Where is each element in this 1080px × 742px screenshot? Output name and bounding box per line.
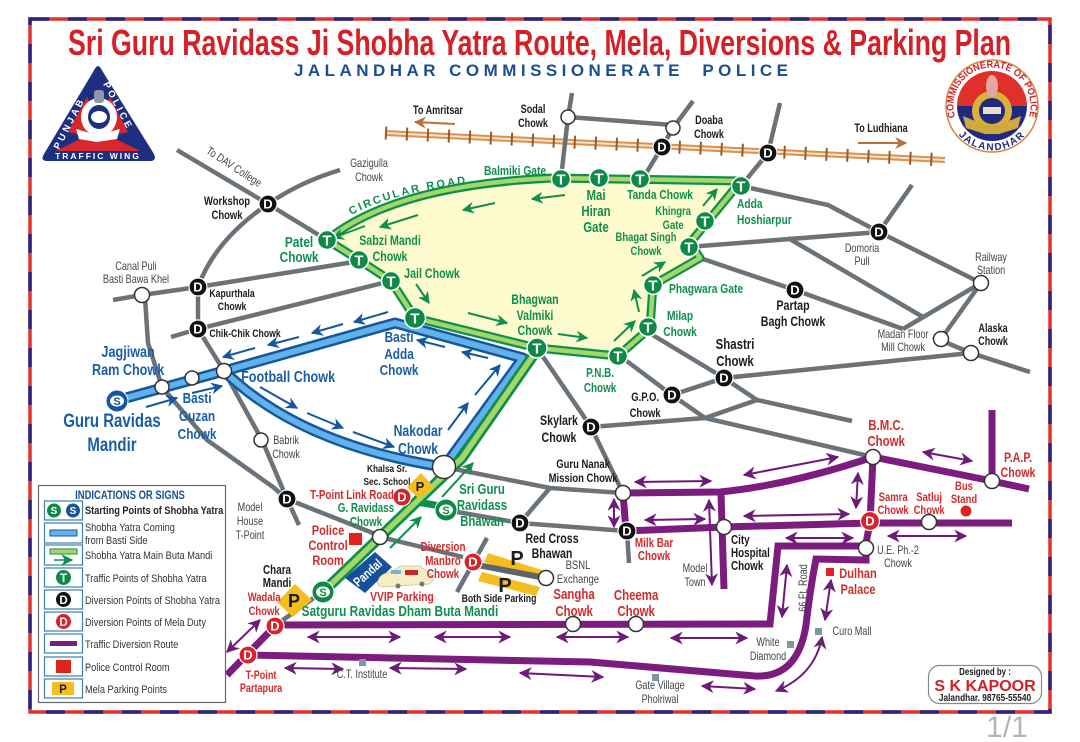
diversion points D black: D [790, 282, 800, 298]
label: Railway Station: Railway [975, 252, 1008, 264]
label: Nakodar Chowk: Nakodar [394, 422, 443, 439]
label: Cheema Chowk: Chowk [617, 603, 655, 619]
label: Sri Guru Ravidass Bhawan: Ravidass [457, 497, 507, 513]
starting points S: S [113, 396, 121, 408]
designer credit box [928, 666, 1042, 704]
legend row: starting points [44, 501, 224, 520]
label: Samra Chowk: Chowk [878, 504, 910, 517]
traffic points T: T [700, 214, 710, 230]
label: Dulhan Palace: Dulhan [839, 566, 877, 581]
green circular road [327, 178, 741, 356]
legend row: yatra main Buta Mandi [44, 545, 212, 565]
diversion points D red: D [468, 554, 478, 570]
label: Model House T-Point: Model [238, 502, 262, 514]
label: Model Town: Model [683, 563, 707, 575]
label: 66 Ft. Road: 66 Ft. Road [798, 564, 810, 612]
traffic points T: T [322, 232, 332, 250]
label: Jagjiwan Ram Chowk: Ram Chowk [92, 362, 165, 379]
label: Gazigulla Chowk: Chowk [355, 172, 384, 184]
pandal: Pandal [351, 556, 385, 590]
label: Phagwara Gate: Phagwara Gate [669, 282, 744, 296]
white junction nodes [134, 110, 1000, 632]
label: Police Control Room: Police [312, 523, 344, 538]
label: Red Cross Bhawan: Red Cross [525, 531, 579, 546]
legend row: traffic points [44, 568, 207, 587]
diversion points D black: D [263, 196, 273, 212]
traffic points T: T [684, 240, 694, 256]
label: Milap Chowk: Chowk [663, 325, 697, 339]
label: To Ludhiana: To Ludhiana [854, 123, 908, 135]
label: Kapurthala Chowk: Kapurthala [209, 288, 255, 300]
designer credit box: Designed by : [959, 666, 1011, 677]
traffic points T: T [386, 274, 396, 290]
label: Adda Hoshiarpur: Hoshiarpur [737, 213, 792, 227]
label: Satluj Chowk: Satluj [916, 491, 942, 504]
gray road network [113, 93, 1030, 625]
label: Both Side Parking: Both Side Parking [462, 593, 536, 605]
label: Bus Stand: Bus [955, 480, 973, 493]
label: To Amritsar: To Amritsar [413, 105, 463, 117]
label: Satluj Chowk: Chowk [914, 504, 946, 517]
traffic points T: T [410, 310, 420, 328]
label: Domoria Pull: Pull [854, 256, 870, 268]
label: U.E. Ph.-2 Chowk: U.E. Ph.-2 [877, 545, 919, 557]
traffic points T [318, 168, 750, 366]
label: Jail Chowk: Jail Chowk [404, 266, 460, 281]
label: Sangha Chowk: Sangha [553, 586, 595, 602]
logo: Punjab Police Traffic Wing: POLICE [103, 82, 132, 128]
label: Bhagwan Valmiki Chowk: Chowk [518, 323, 553, 338]
label: Gate Village Pholriwal: Gate Village [635, 680, 685, 692]
label: Chara Mandi: Mandi [263, 577, 291, 590]
VVIP car [378, 566, 433, 588]
label: Police Control Room: Control [308, 538, 348, 553]
label: City Hospital Chowk: Hospital [731, 547, 770, 560]
legend row: traffic diversion route: Traffic Diversion Route [85, 639, 179, 651]
label: Wadala Chowk: Chowk [249, 605, 281, 618]
label: Babrik Chowk: Babrik [273, 435, 300, 447]
legend row: diversion points mela [44, 612, 207, 631]
bus stand marker [960, 506, 972, 516]
diversion points D black: D [622, 524, 632, 538]
legend row: diversion points yatra: Diversion Points of Shobha Yatra [85, 595, 220, 607]
diversion points D red: D [270, 618, 280, 634]
label: Cheema Chowk: Cheema [614, 587, 659, 603]
label: Patel Chowk: Chowk [280, 249, 319, 265]
label: Partap Bagh Chowk: Bagh Chowk [761, 314, 825, 329]
label: Canal Puli Basti Bawa Khel: Basti Bawa Khel [103, 274, 169, 286]
starting points S: S [319, 587, 327, 599]
legend row: starting points: S [70, 506, 77, 517]
label: Diversion Manbro Chowk: Chowk [427, 568, 460, 581]
legend row: yatra from Basti side: Shobha Yatra Coming [85, 522, 175, 534]
label: circular road: CIRCULAR ROAD [349, 176, 465, 214]
label: Satguru Ravidas Dham Buta Mandi: Satguru Ravidas Dham Buta Mandi [302, 603, 498, 619]
route direction arrows: Amritsar and Ludhiana [415, 122, 906, 143]
label: Police Control Room: Room [312, 553, 344, 568]
label: White Diamond: Diamond [750, 651, 786, 663]
legend row: police control room [44, 657, 170, 676]
label: Milk Bar Chowk: Milk Bar [635, 537, 674, 550]
label: Khalsa Sr. Sec. School: Khalsa Sr. [367, 463, 407, 475]
traffic points T: T [354, 252, 364, 270]
label: Canal Puli Basti Bawa Khel: Canal Puli [115, 261, 157, 273]
blue yatra road from Basti side [115, 323, 523, 467]
diversion points D black: D [193, 322, 203, 336]
traffic diversion routes [227, 410, 1029, 676]
label: Mai Hiran Gate: Hiran [581, 203, 611, 219]
diversion points D black: D [657, 140, 667, 154]
label: Chara Mandi: Chara [263, 564, 292, 577]
label: Doaba Chowk: Chowk [694, 129, 724, 141]
parking bands: P [510, 548, 524, 570]
label: Basti Guzan Chowk: Chowk [178, 426, 217, 442]
route marker squares [359, 628, 822, 681]
label: Domoria Pull: Domoria [845, 243, 879, 255]
diversion points D black: D [515, 516, 525, 530]
Dulhan Palace marker [826, 568, 834, 576]
logo: Punjab Police Traffic Wing [42, 66, 155, 161]
label: G. Ravidass Chowk: Chowk [350, 516, 383, 529]
label: Kapurthala Chowk: Chowk [218, 301, 247, 313]
label: P.A.P. Chowk: Chowk [1001, 465, 1036, 480]
label: Skylark Chowk: Skylark [540, 413, 578, 428]
label: Babrik Chowk: Chowk [272, 449, 301, 461]
label: Sri Guru Ravidass Bhawan: Sri Guru [459, 481, 505, 497]
legend row: police control room: Police Control Room [85, 662, 170, 674]
label: P.N.B. Chowk: Chowk [584, 382, 617, 395]
label: Milap Chowk: Milap [667, 309, 693, 323]
label: C.T. Institute: C.T. Institute [337, 669, 387, 681]
legend row: yatra from Basti side [44, 522, 175, 547]
label: City Hospital Chowk: Chowk [731, 560, 764, 573]
legend row: traffic diversion route [44, 634, 179, 653]
label: Guru Ravidas Mandir: Guru Ravidas [63, 410, 161, 431]
logo: Punjab Police Traffic Wing: PUNJAB [54, 100, 83, 150]
label: Jagjiwan Ram Chowk: Jagjiwan [101, 344, 155, 361]
label: Tanda Chowk: Tanda Chowk [627, 188, 693, 202]
traffic points T: T [736, 178, 746, 196]
traffic points T: T [532, 340, 542, 358]
traffic points T: T [613, 348, 623, 366]
panel: legend [38, 486, 226, 702]
label: Red Cross Bhawan: Bhawan [532, 546, 572, 561]
label: T-Point Link Road: T-Point Link Road [310, 489, 394, 502]
label: Workshop Chowk: Workshop [204, 195, 250, 208]
label: VVIP Parking: VVIP Parking [370, 590, 434, 604]
green main road to Buta Mandi [323, 350, 537, 592]
label: Samra Chowk: Samra [879, 491, 908, 504]
label: To DAV College: To DAV College [204, 145, 264, 190]
label: Bhagat Singh Chowk: Chowk [630, 245, 662, 258]
label: Basti Adda Chowk: Chowk [380, 362, 419, 378]
label: Basti Adda Chowk: Adda [384, 346, 414, 362]
label: G.P.O. Chowk: G.P.O. [631, 391, 659, 404]
label: T-Point Partapura: Partapura [240, 683, 282, 695]
label: Mai Hiran Gate: Gate [583, 219, 609, 235]
label: Mai Hiran Gate: Mai [586, 187, 606, 203]
designer credit box: Jalandhar. 98765-55540 [939, 692, 1031, 704]
diversion points D black: D [667, 388, 677, 402]
logo: Commissionerate of Police Jalandhar seal [945, 59, 1039, 153]
label: Gate Village Pholriwal: Pholriwal [642, 694, 678, 706]
label: Patel Chowk: Patel [285, 234, 313, 250]
starting points S [106, 390, 457, 603]
legend row: traffic points: Traffic Points of Shobha Yatra [85, 573, 207, 585]
label: White Diamond: White [756, 637, 780, 649]
label: Basti Guzan Chowk: Basti [183, 390, 212, 406]
label: BSNL Exchange: BSNL [566, 559, 590, 572]
label: Diversion Manbro Chowk: Diversion [421, 541, 466, 554]
label: Shastri Chowk: Chowk [716, 353, 754, 369]
label: B.M.C. Chowk: Chowk [867, 433, 905, 449]
label: P.A.P. Chowk: P.A.P. [1004, 450, 1032, 465]
logo: Punjab Police Traffic Wing: TRAFFIC WING [55, 151, 141, 161]
label: Gazigulla Chowk: Gazigulla [350, 158, 388, 170]
mela parking diamonds: P [288, 591, 300, 611]
label: Sodal Chowk: Sodal [521, 104, 545, 116]
diversion points D black: D [193, 280, 203, 294]
mela parking diamonds [277, 473, 434, 617]
designer credit box: S K KAPOOR [934, 678, 1036, 695]
legend heading: INDICATIONS OR SIGNS [75, 489, 185, 502]
label: Nakodar Chowk: Chowk [398, 440, 438, 457]
traffic points T: T [643, 320, 653, 336]
legend row: diversion points mela: Diversion Points of Mela Duty [85, 617, 207, 629]
label: Sabzi Mandi Chowk: Sabzi Mandi [359, 233, 421, 248]
railway track [385, 133, 945, 160]
label: Partap Bagh Chowk: Partap [776, 298, 810, 313]
legend row: starting points: Starting Points of Shobha Yatra [85, 505, 224, 517]
logo: Commissionerate of Police Jalandhar seal: COMMISSIONERATE OF POLICE [946, 60, 1038, 118]
label: BSNL Exchange: Exchange [557, 573, 599, 586]
legend row: starting points: S [51, 506, 58, 517]
diversion points D black: D [719, 370, 729, 386]
diversion points D red: D [243, 648, 253, 662]
label: City Hospital Chowk: City [731, 534, 750, 547]
label: Madan Floor Mill Chowk: Mill Chowk [881, 342, 926, 354]
label: Model House T-Point: House [237, 516, 263, 528]
legend row: parking points [44, 679, 167, 698]
label: Dulhan Palace: Palace [840, 582, 876, 597]
label: U.E. Ph.-2 Chowk: Chowk [884, 558, 913, 570]
label: Basti Guzan Chowk: Guzan [179, 408, 215, 424]
label: Football Chowk: Football Chowk [241, 369, 336, 386]
label: Adda Hoshiarpur: Adda [737, 197, 763, 211]
logo: Commissionerate of Police Jalandhar seal: JALANDHAR [959, 132, 1024, 150]
pandal [345, 552, 392, 593]
parking bands [478, 548, 545, 597]
label: Alaska Chowk: Alaska [978, 323, 1008, 335]
diversion points D black: D [763, 146, 773, 160]
label: Balmiki Gate: Balmiki Gate [484, 164, 547, 178]
label: Bhagat Singh Chowk: Bhagat Singh [615, 231, 677, 244]
label: G.P.O. Chowk: Chowk [630, 407, 662, 420]
traffic points T: T [635, 172, 645, 188]
double-headed diversion arrows [227, 452, 972, 691]
label: Model House T-Point: T-Point [236, 530, 265, 542]
label: Railway Station: Station [977, 265, 1005, 277]
label: Basti Adda Chowk: Basti [385, 329, 414, 345]
label: Shastri Chowk: Shastri [716, 336, 754, 352]
blue direction arrows [146, 312, 500, 447]
diversion points D black: D [874, 224, 884, 240]
label: Bhagwan Valmiki Chowk: Bhagwan [511, 292, 559, 307]
label: Sabzi Mandi Chowk: Chowk [373, 249, 408, 264]
label: Khingra Gate: Gate [663, 219, 684, 232]
legend row: diversion points yatra [44, 590, 220, 609]
legend row: diversion points yatra: D [59, 595, 68, 607]
label: Khingra Gate: Khingra [655, 205, 692, 218]
label: Diversion Manbro Chowk: Manbro [425, 555, 461, 568]
label: G. Ravidass Chowk: G. Ravidass [338, 502, 394, 515]
label: Khalsa Sr. Sec. School: Sec. School [364, 476, 410, 488]
mela parking diamonds: P [416, 479, 425, 494]
traffic points T: T [648, 278, 658, 294]
label: Madan Floor Mill Chowk: Madan Floor [878, 329, 929, 341]
legend row: yatra from Basti side: from Basti Side [85, 535, 148, 547]
label: Sri Guru Ravidass Bhawan: Bhawan [460, 513, 504, 529]
label: Chik-Chik Chowk: Chik-Chik Chowk [209, 328, 281, 340]
label: Guru Nanak Mission Chowk: Mission Chowk [549, 472, 618, 485]
label: Skylark Chowk: Chowk [542, 430, 577, 445]
diversion points D black: D [586, 420, 596, 434]
subtitle: JALANDHAR COMMISSIONERATE POLICE [294, 61, 788, 80]
legend row: diversion points mela: D [59, 617, 68, 629]
diversion points D red: D [865, 514, 875, 528]
label: Sodal Chowk: Chowk [518, 118, 548, 130]
legend row: yatra main Buta Mandi: Shobha Yatra Main Buta Mandi [85, 550, 212, 562]
label: Wadala Chowk: Wadala [248, 591, 281, 604]
diversion points D black: D [282, 492, 292, 506]
starting points S: S [442, 505, 450, 517]
diversion points D red [239, 488, 880, 664]
label: Guru Ravidas Mandir: Mandir [87, 434, 137, 455]
label: Model Town: Town [684, 577, 706, 589]
legend row: traffic points: T [60, 571, 68, 585]
diversion points D black [189, 138, 888, 540]
label: P.N.B. Chowk: P.N.B. [586, 367, 614, 380]
label: Guru Nanak Mission Chowk: Guru Nanak [556, 458, 611, 471]
label: Curo Mall: Curo Mall [833, 626, 871, 638]
legend row: parking points: Mela Parking Points [85, 684, 167, 696]
label: Sangha Chowk: Chowk [555, 603, 593, 619]
label: Bhagwan Valmiki Chowk: Valmiki [517, 308, 553, 323]
label: Bus Stand: Stand [951, 493, 977, 506]
label: Workshop Chowk: Chowk [212, 209, 243, 222]
traffic points T: T [594, 170, 604, 188]
label: T-Point Partapura: T-Point [246, 670, 277, 682]
label: Milk Bar Chowk: Chowk [638, 550, 671, 563]
traffic points T: T [556, 172, 566, 188]
police control room marker [349, 533, 362, 545]
green direction arrows [333, 189, 717, 548]
diversion points D red: D [397, 490, 407, 504]
label: Doaba Chowk: Doaba [695, 115, 723, 127]
label: Alaska Chowk: Chowk [978, 336, 1008, 348]
legend row: parking points: P [59, 684, 67, 696]
label: B.M.C. Chowk: B.M.C. [868, 417, 904, 433]
parking bands: P [498, 575, 512, 597]
